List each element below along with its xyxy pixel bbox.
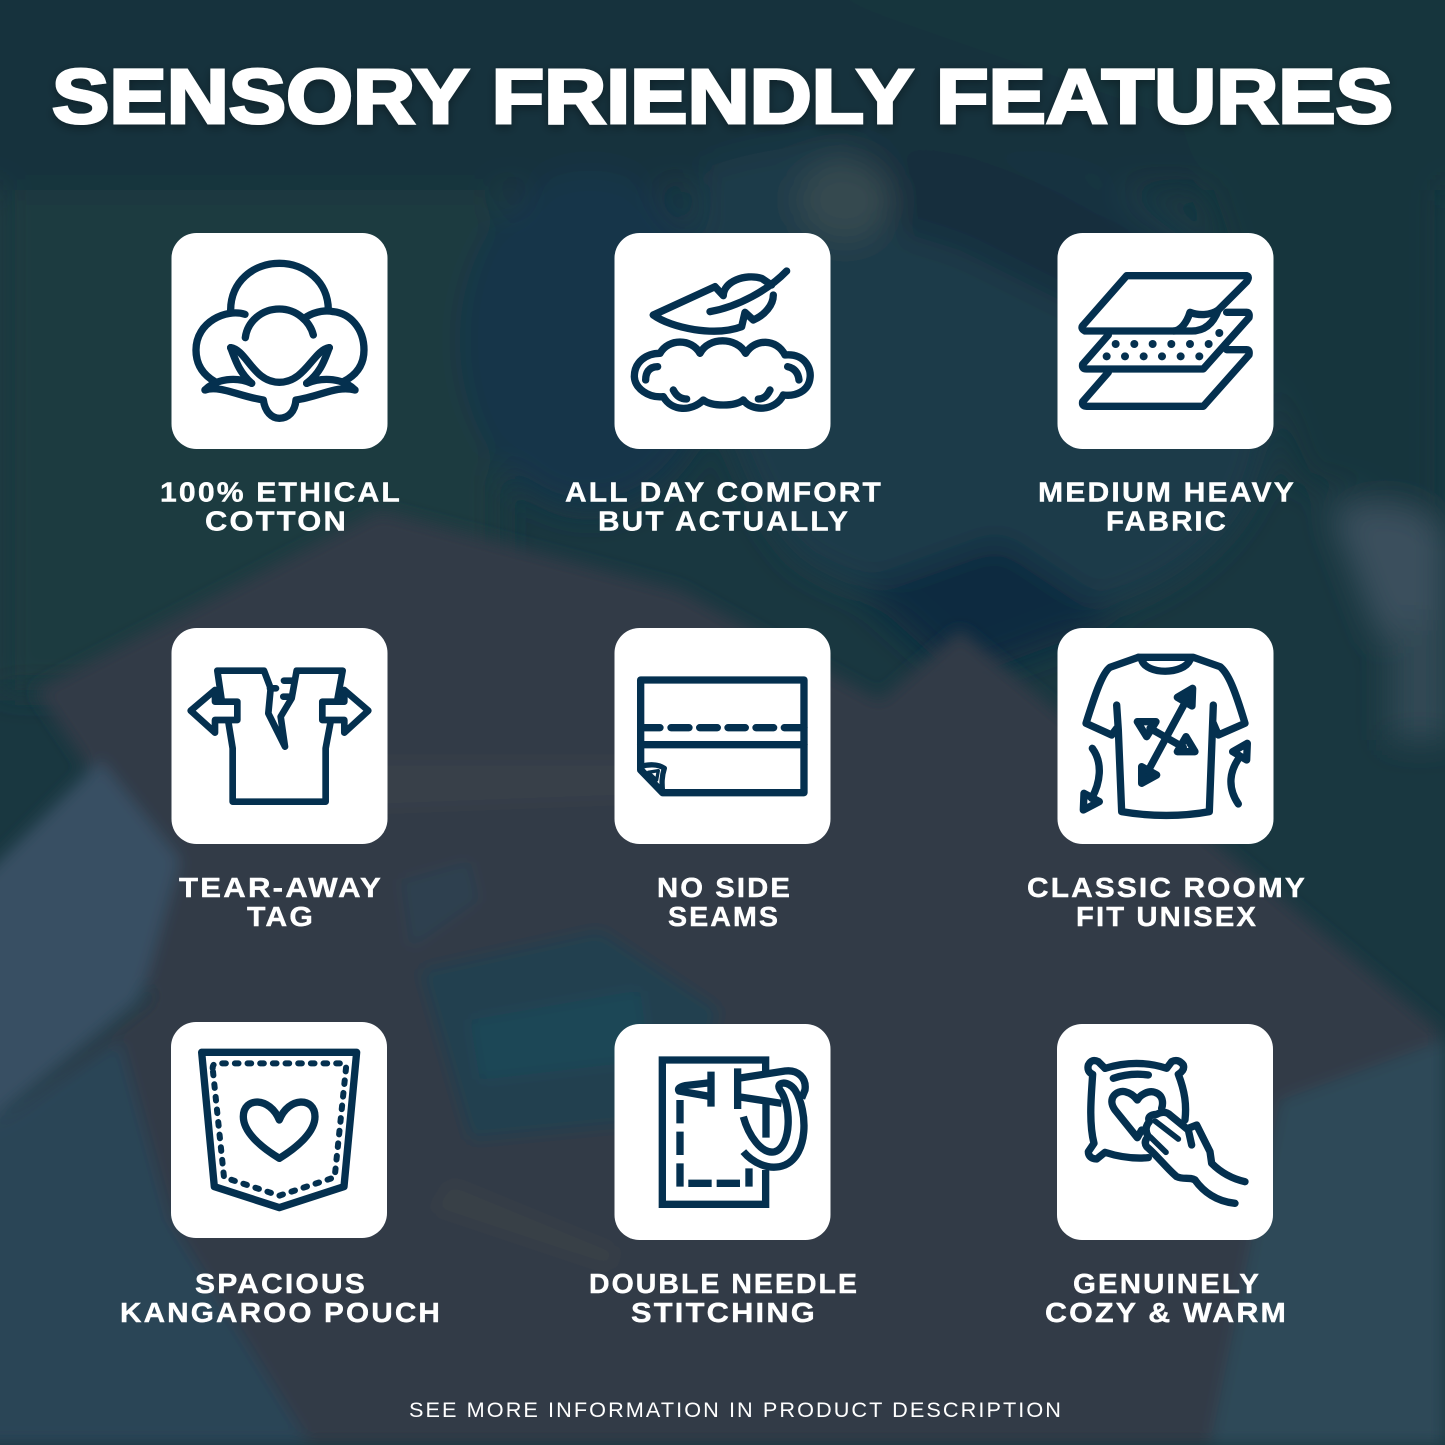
label: tag: TEAR-AWAY: [179, 872, 383, 903]
label: seams: SEAMS: [668, 901, 780, 932]
card: cotton: [172, 233, 388, 449]
label: cotton: COTTON: [205, 506, 348, 536]
icon: torn tag with arrows: [191, 671, 368, 802]
feature: medium heavy fabric: [1038, 233, 1296, 536]
label: stitching: DOUBLE NEEDLE: [589, 1268, 859, 1299]
feature: tear-away tag: [172, 628, 388, 932]
card: fabric: [1058, 233, 1274, 449]
label: seams: [657, 872, 792, 932]
feature: classic roomy fit: [1027, 628, 1307, 932]
label: fit: FIT UNISEX: [1076, 901, 1258, 932]
feature: no side seams: [614, 628, 830, 932]
label: cozy: GENUINELY: [1073, 1268, 1261, 1299]
icon: pocket with heart: [202, 1052, 357, 1208]
icon: feather over cloud: [634, 271, 810, 408]
card: fit: [1058, 628, 1274, 844]
label: comfort: BUT ACTUALLY: [598, 506, 850, 536]
label: pouch: [120, 1268, 442, 1328]
label: cotton: [160, 476, 402, 536]
title: SENSORY FRIENDLY FEATURES: [52, 54, 1393, 140]
label: fabric: MEDIUM HEAVY: [1038, 476, 1296, 508]
label: comfort: [565, 476, 883, 536]
card: cozy: [1057, 1024, 1273, 1240]
icon: pillow with heart and hand: [1088, 1061, 1245, 1203]
label: cozy: [1045, 1268, 1288, 1328]
label: stitching: STITCHING: [631, 1297, 817, 1328]
icon: cotton boll: [196, 263, 364, 418]
label: seams: NO SIDE: [657, 872, 792, 903]
card: pouch: [171, 1022, 387, 1238]
feature: genuinely cozy and warm: [1045, 1024, 1288, 1328]
card: comfort: [614, 233, 830, 449]
label: tag: [179, 872, 383, 932]
label: comfort: ALL DAY COMFORT: [565, 476, 883, 508]
feature: double needle stitching: [589, 1024, 859, 1328]
label: tag: TAG: [247, 901, 315, 932]
footer note: SEE MORE INFORMATION IN PRODUCT DESCRIPTION: [409, 1399, 1063, 1422]
card: seams: [614, 628, 830, 844]
label: cotton: 100% ETHICAL: [160, 476, 402, 508]
icon: fabric with seam lines: [641, 680, 804, 793]
label: fabric: [1038, 476, 1296, 536]
icon: fabric layers: [1082, 276, 1249, 406]
label: cozy: COZY & WARM: [1045, 1297, 1288, 1328]
feature: all day comfort: [565, 233, 883, 536]
label: pouch: SPACIOUS: [195, 1268, 367, 1299]
label: fit: CLASSIC ROOMY: [1027, 872, 1307, 903]
card: stitching: [614, 1024, 830, 1240]
feature: spacious kangaroo pouch: [120, 1022, 442, 1328]
label: stitching: [589, 1268, 859, 1328]
icon: stitched fabric with needle: [662, 1060, 805, 1204]
label: fabric: FABRIC: [1106, 506, 1228, 536]
feature: 100% ethical cotton: [160, 233, 402, 536]
label: fit: [1027, 872, 1307, 932]
icon: t-shirt with stretch arrows: [1083, 657, 1247, 815]
label: pouch: KANGAROO POUCH: [120, 1297, 442, 1328]
card: tag: [172, 628, 388, 844]
